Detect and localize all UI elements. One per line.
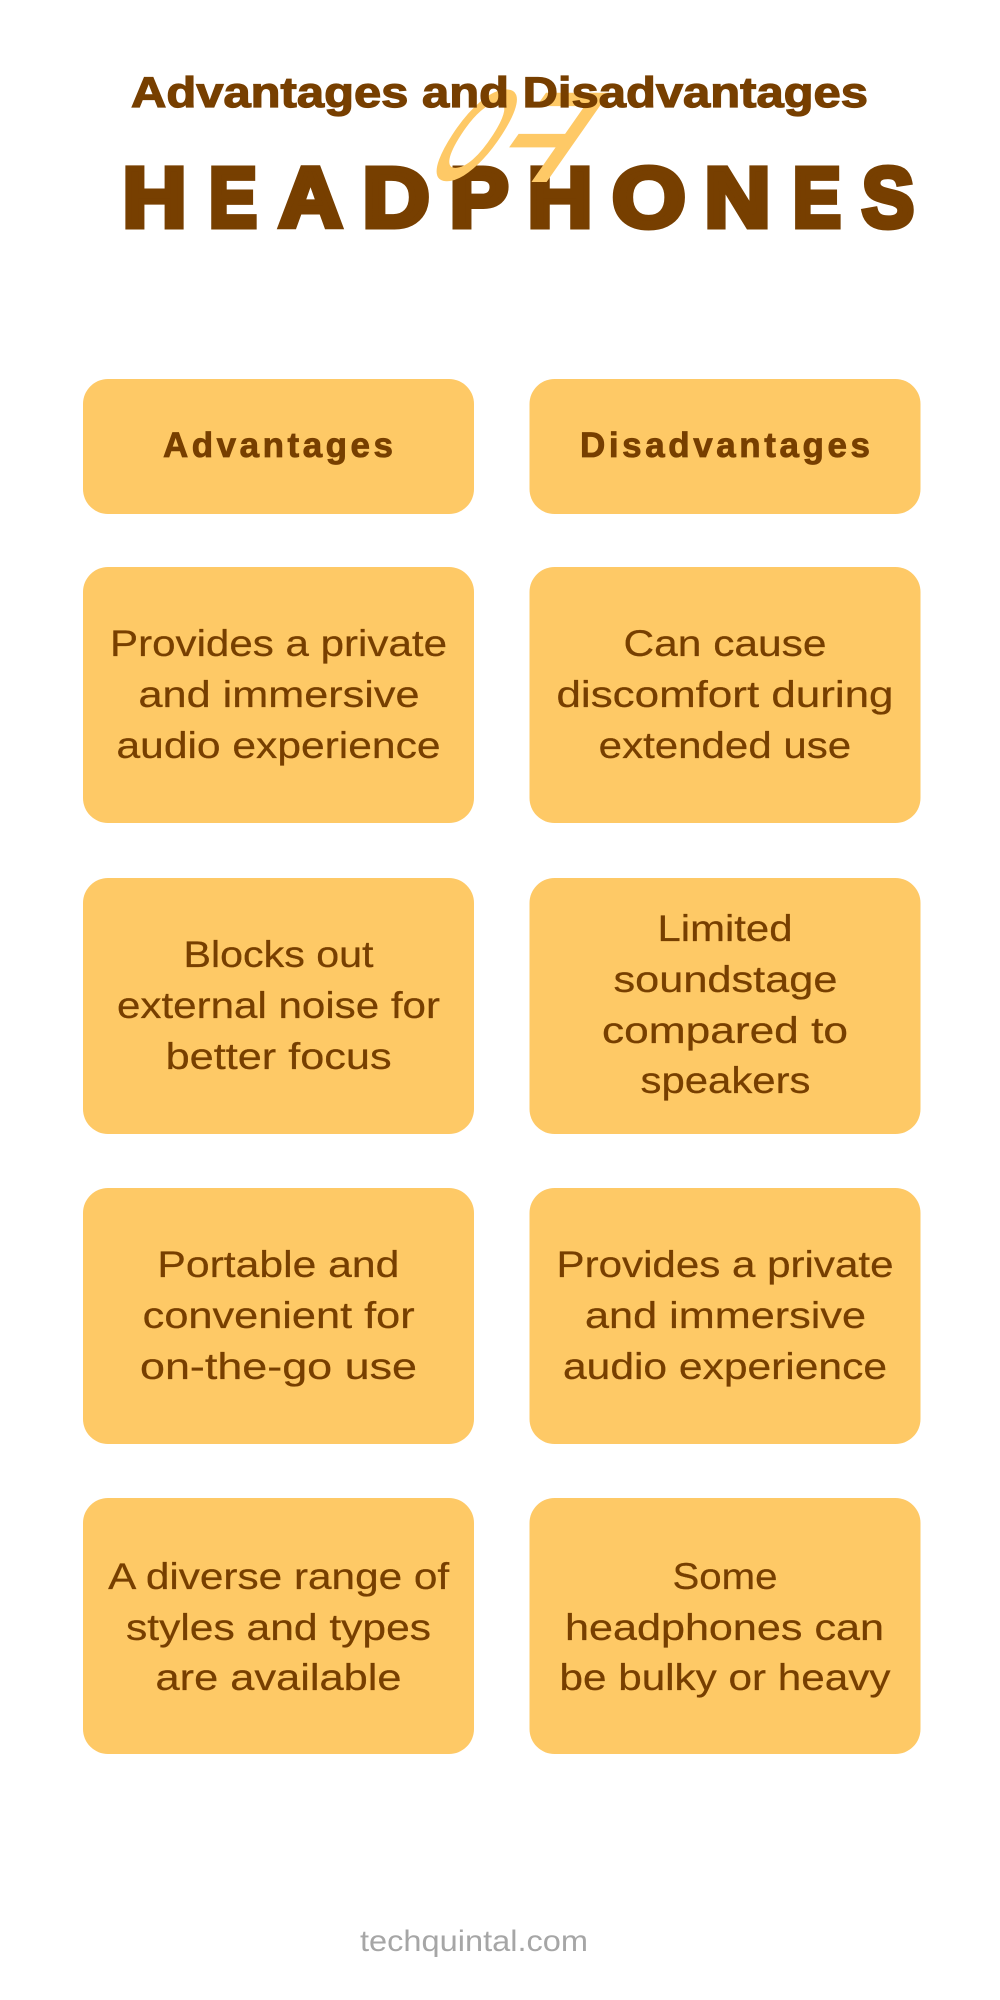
panel: bulky or heavy: Some [672, 1556, 778, 1597]
panel: Advantages header: Advantages [163, 426, 393, 465]
panel: diverse range of styles: styles and types [126, 1607, 431, 1648]
panel: Advantages header [83, 379, 474, 514]
panel: discomfort during extended use: Can cause [624, 623, 826, 664]
panel: portable and convenient: convenient for [143, 1295, 415, 1336]
title: HEADPHONES: P [450, 150, 508, 244]
panel: limited soundstage [530, 878, 920, 1134]
panel: limited soundstage: compared to [602, 1010, 848, 1051]
panel: Disadvantages header: Disadvantages [580, 426, 870, 465]
panel: blocks external noise: better focus [166, 1036, 392, 1077]
panel: limited soundstage: speakers [640, 1060, 810, 1101]
panel: private and immersive audio (disadvantage): Provides a private [556, 1244, 894, 1285]
footer: website: techquintal.com [360, 1925, 588, 1958]
panel: private and immersive audio (advantage): Provides a private [110, 623, 447, 664]
title: HEADPHONES: H [123, 150, 186, 244]
panel: private and immersive audio (advantage) [83, 567, 474, 823]
panel: private and immersive audio (disadvantage) [530, 1188, 920, 1444]
title: HEADPHONES: A [279, 150, 342, 244]
title: Advantages and Disadvantages: Advantages and Disadvantages [131, 69, 868, 117]
panel: bulky or heavy [530, 1498, 920, 1754]
panel: bulky or heavy: be bulky or heavy [560, 1657, 891, 1698]
panel: diverse range of styles: are available [156, 1657, 402, 1698]
panel: private and immersive audio (advantage): audio experience [116, 725, 440, 766]
title: HEADPHONES: O [612, 150, 686, 244]
panel: private and immersive audio (disadvantage): and immersive [585, 1295, 866, 1336]
panel: private and immersive audio (advantage): and immersive [138, 674, 420, 715]
title: script word OF: F [463, 69, 634, 207]
panel: discomfort during extended use: extended use [599, 725, 851, 766]
panel: discomfort during extended use: discomfort during [556, 674, 894, 715]
panel: Disadvantages header [530, 379, 920, 514]
panel: limited soundstage: soundstage [614, 959, 838, 1000]
panel: portable and convenient: on-the-go use [140, 1346, 417, 1387]
title: HEADPHONES: S [862, 150, 914, 244]
panel: blocks external noise: external noise for [117, 985, 440, 1026]
title: HEADPHONES: H [528, 150, 592, 244]
title: HEADPHONES [123, 150, 914, 244]
panel: diverse range of styles: A diverse range of [108, 1556, 450, 1597]
panel: limited soundstage: Limited [658, 908, 792, 949]
panel: diverse range of styles [83, 1498, 474, 1754]
panel: discomfort during extended use [530, 567, 920, 823]
title: HEADPHONES: N [704, 150, 770, 244]
title: HEADPHONES: E [209, 150, 257, 244]
panel: portable and convenient [83, 1188, 474, 1444]
panel: blocks external noise: Blocks out [184, 934, 374, 975]
panel: blocks external noise [83, 878, 474, 1134]
panel: portable and convenient: Portable and [157, 1244, 399, 1285]
panel: bulky or heavy: headphones can [565, 1607, 884, 1648]
title: HEADPHONES: E [793, 150, 841, 244]
title: script word OF: O [405, 65, 549, 204]
title: HEADPHONES: D [362, 150, 430, 244]
panel: private and immersive audio (disadvantage): audio experience [563, 1346, 887, 1387]
